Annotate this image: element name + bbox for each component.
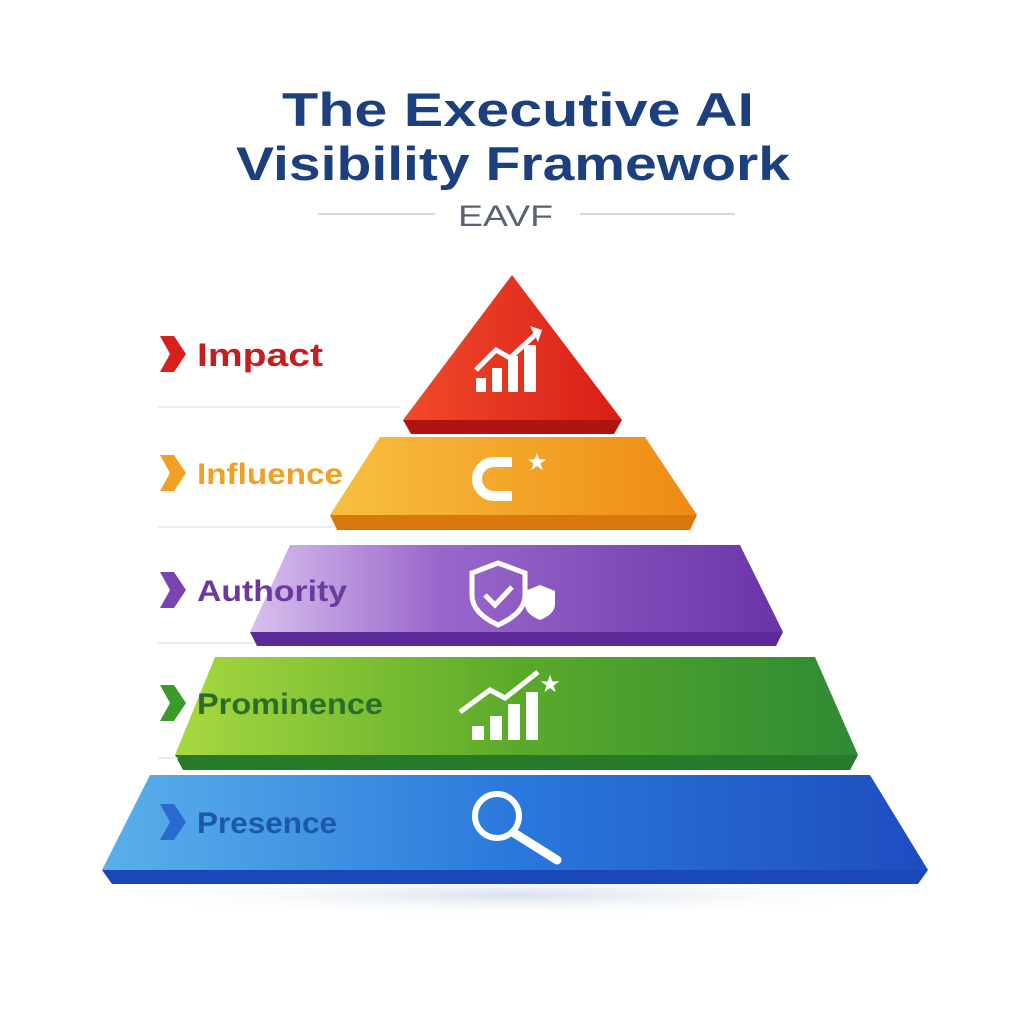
layer: authority	[250, 545, 783, 646]
label: Prominence: Prominence	[197, 688, 383, 721]
title	[236, 83, 791, 190]
layer: prominence	[175, 657, 858, 770]
icon: shield check	[472, 563, 525, 625]
title: The Executive AI	[282, 83, 754, 136]
layer: influence	[330, 437, 697, 530]
layer: presence	[102, 775, 928, 884]
icon: magnet star: ★	[526, 449, 548, 476]
label: Influence: Influence	[197, 458, 343, 491]
icon: magnet star	[477, 449, 548, 501]
label: Influence	[160, 455, 343, 491]
icon: rising bars star	[460, 671, 561, 740]
pyramid	[102, 275, 928, 884]
icon: magnifier	[475, 794, 557, 860]
shadow	[95, 873, 935, 917]
subtitle: EAVF: EAVF	[458, 200, 553, 233]
label: Presence: Presence	[197, 807, 337, 840]
separators	[158, 407, 400, 758]
label: Impact: Impact	[197, 337, 323, 373]
icon: chart up	[476, 326, 542, 392]
layer: impact	[403, 275, 622, 434]
label: Impact	[160, 336, 323, 373]
icon: rising bars star: ★	[539, 671, 561, 698]
label: Authority: Authority	[197, 575, 347, 608]
title: Visibility Framework	[236, 137, 791, 190]
label: Presence	[160, 804, 337, 840]
label: Authority	[160, 572, 347, 608]
